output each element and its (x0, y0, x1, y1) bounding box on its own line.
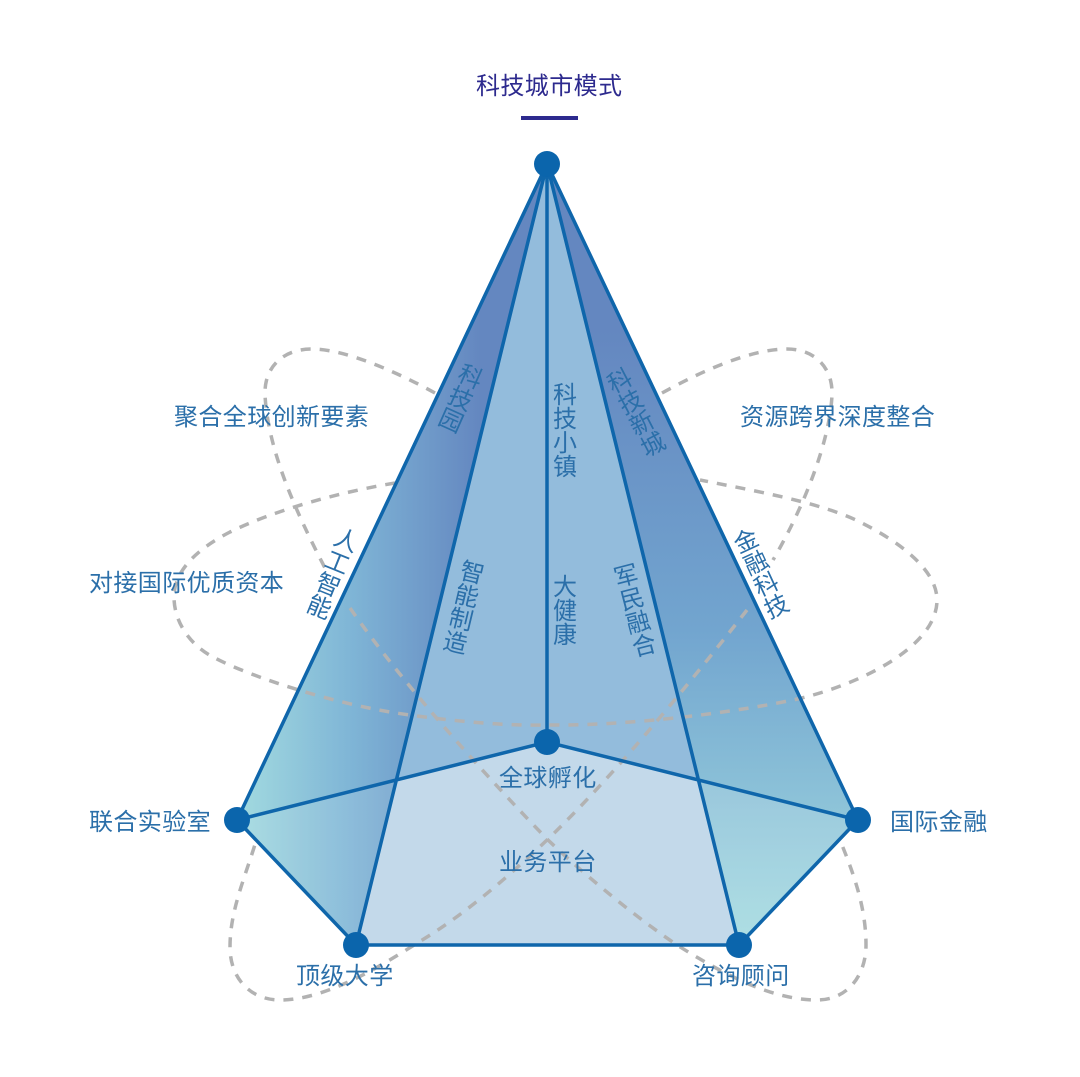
face: inner back panels (397, 164, 698, 780)
face: right side (547, 164, 858, 945)
node: apex (534, 151, 560, 177)
label: artificial intelligence: 人工智能 (300, 522, 362, 622)
label: business platform: 业务平台 (499, 849, 597, 876)
label: tech town: 科技小镇 (548, 382, 576, 478)
label: upper left orbit: 聚合全球创新要素 (174, 404, 369, 431)
label: new tech city: 科技新城 (599, 364, 668, 462)
label: upper right orbit: 资源跨界深度整合 (740, 404, 935, 431)
dashed orbit: upper left to lower right (265, 349, 866, 1000)
face: floor platform (356, 742, 739, 945)
node: finance (845, 807, 871, 833)
dashed orbit: horizontal (174, 480, 937, 725)
label: finance: 国际金融 (890, 809, 988, 836)
face: left side (237, 164, 547, 945)
pyramid edges (237, 164, 858, 945)
title: 科技城市模式 (476, 73, 622, 100)
label: intelligent manufacturing: 智能制造 (437, 556, 486, 656)
node: global incubation (534, 729, 560, 755)
node: joint lab (224, 807, 250, 833)
label: health: 大健康 (548, 574, 576, 646)
dashed orbit: upper right to lower left (230, 349, 832, 1000)
label: civil-military integration: 军民融合 (607, 561, 658, 661)
label: fintech: 金融科技 (726, 525, 792, 624)
label: consulting: 咨询顾问 (692, 963, 790, 990)
label: global incubation: 全球孵化 (499, 765, 597, 792)
label: science park: 科技园 (431, 358, 486, 436)
node: consulting (726, 932, 752, 958)
node: university (343, 932, 369, 958)
label: joint lab: 联合实验室 (89, 809, 211, 836)
label: university: 顶级大学 (296, 963, 394, 990)
pyramid faces (237, 164, 858, 945)
face: right lower highlight (698, 780, 858, 945)
title underline (521, 116, 578, 120)
label: left orbit: 对接国际优质资本 (89, 570, 284, 597)
face: left lower highlight (237, 780, 397, 945)
